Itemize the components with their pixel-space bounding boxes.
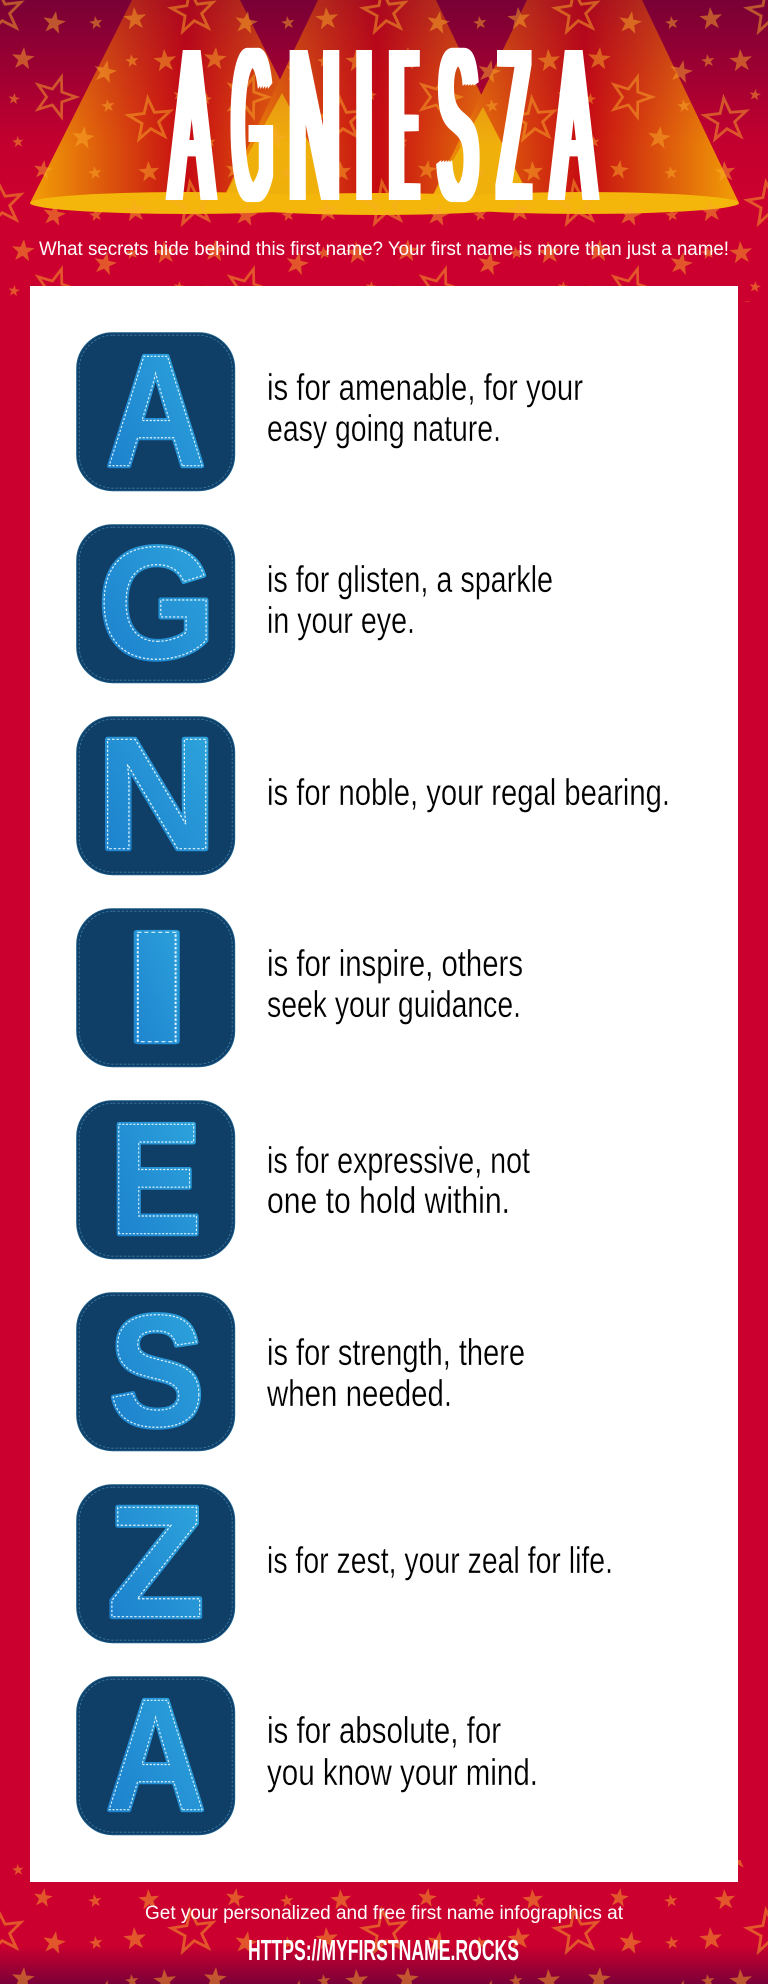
title: I (355, 4, 374, 247)
icon: letter A (second): A (106, 1666, 206, 1844)
icon: letter S: S (109, 1283, 204, 1460)
title: G (232, 4, 271, 247)
text: strength: when needed. (266, 1373, 452, 1414)
icon: letter A (77, 322, 235, 500)
icon: letter G: G (98, 514, 215, 692)
title: A (552, 4, 594, 247)
star pattern top (0, 0, 768, 302)
icon: letter S (77, 1283, 235, 1460)
text: noble: is for noble, your regal bearing. (267, 772, 670, 813)
text: absolute (267, 1710, 538, 1793)
text: amenable: is for amenable, for your (267, 367, 583, 408)
icon: letter I (77, 898, 235, 1075)
title (166, 4, 600, 247)
page background top (0, 0, 768, 200)
icon: letter Z: Z (107, 1473, 204, 1651)
text: absolute: is for absolute, for (267, 1710, 501, 1751)
icon: letter I: I (120, 898, 193, 1075)
text: strength (266, 1332, 525, 1414)
text: amenable: easy going nature. (267, 408, 501, 449)
title: S (439, 4, 477, 247)
icon: letter A (second) (77, 1666, 235, 1844)
icon: letter I: I (120, 898, 193, 1075)
footer url: HTTPS://MYFIRSTNAME.ROCKS (248, 1935, 519, 1967)
title: Z (500, 4, 528, 247)
text: absolute: you know your mind. (267, 1752, 538, 1793)
page background bottom (0, 1945, 768, 1984)
spotlight floor ellipses (30, 192, 739, 215)
footer text: Get your personalized and free first name infographics at (145, 1903, 624, 1924)
icon: letter E: E (110, 1090, 202, 1268)
icon: letter A: A (106, 322, 206, 500)
text: inspire: seek your guidance. (267, 984, 521, 1025)
icon: letter G: G (98, 514, 215, 692)
text: strength: is for strength, there (267, 1332, 525, 1373)
title: A (170, 4, 212, 247)
text: zest: is for zest, your zeal for life. (267, 1540, 613, 1581)
text: glisten: is for glisten, a sparkle (267, 559, 553, 600)
icon: letter S: S (109, 1283, 204, 1460)
text: amenable (267, 367, 583, 449)
icon: letter Z (77, 1473, 235, 1651)
text: inspire: is for inspire, others (267, 943, 523, 984)
panel: white content (30, 286, 738, 1882)
icon: letter A (second): A (106, 1666, 206, 1844)
text: expressive: one to hold within. (267, 1180, 510, 1221)
icon: letter N: N (96, 704, 217, 883)
text: glisten (267, 559, 553, 641)
title: E (392, 4, 416, 247)
icon: letter Z: Z (107, 1473, 204, 1651)
icon: letter E (77, 1090, 235, 1268)
text: expressive: is for expressive, not (267, 1140, 531, 1181)
icon: letter A: A (106, 322, 206, 500)
title: N (289, 4, 340, 247)
icon: letter N: N (96, 704, 217, 883)
subtitle: What secrets hide behind this first name? Your first name is more than just a name! (39, 239, 729, 260)
text: expressive (267, 1140, 531, 1221)
text: glisten: in your eye. (267, 600, 415, 641)
text: inspire (267, 943, 523, 1025)
star pattern bottom (0, 1860, 768, 1984)
icon: letter E: E (110, 1090, 202, 1268)
spotlights (30, 0, 739, 203)
